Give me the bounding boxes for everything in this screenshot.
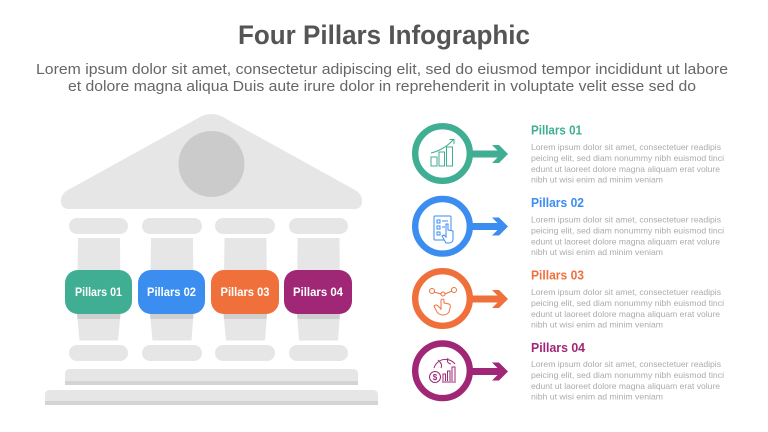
item 1: circle and arrow — [415, 126, 508, 181]
label: pillars 01 — [65, 270, 132, 314]
upper step — [65, 369, 358, 385]
label: pillars 04: Pillars 04 — [293, 287, 344, 299]
item 3: circle and arrow — [415, 271, 508, 326]
pediment — [61, 114, 362, 209]
item 1: body: Lorem ipsum dolor sit amet, consectetuer readipis — [531, 142, 721, 152]
item 2: circle and arrow — [415, 199, 508, 254]
subtitle: Lorem ipsum dolor sit amet, consectetur adipiscing elit, sed do eiusmod tempor incididunt ut labore — [36, 61, 728, 78]
item 3: body: edunt ut laoreet dolore magna aliquam erat volure — [531, 309, 720, 319]
label: pillars 03 — [211, 270, 279, 314]
subtitle: et dolore magna aliqua Duis aute irure dolor in reprehenderit in voluptate velit esse sed do — [68, 78, 696, 95]
column 3 — [215, 218, 275, 361]
item 3: body — [531, 287, 724, 330]
icon: dollar sign: $ — [433, 373, 438, 382]
item 4: body: Lorem ipsum dolor sit amet, consectetuer readipis — [531, 359, 721, 369]
label: pillars 04 — [284, 270, 352, 314]
item 1: body: peicing elit, sed diam nonummy nibh euismod tinci — [531, 153, 724, 163]
label: pillars 01: Pillars 01 — [75, 287, 123, 299]
icon: hand touching nodes — [430, 288, 456, 315]
column 4 — [289, 218, 348, 361]
item 4: body: nibh ut wisi enim ad minim veniam — [531, 392, 663, 402]
icon: checklist with hand — [434, 216, 453, 243]
item 4: circle and arrow — [415, 344, 508, 398]
column 1 — [69, 218, 128, 361]
lower step — [45, 390, 378, 405]
item 2: heading: Pillars 02 — [531, 195, 584, 210]
item 3: body: Lorem ipsum dolor sit amet, consectetuer readipis — [531, 287, 721, 297]
item 2: body: edunt ut laoreet dolore magna aliquam erat volure — [531, 236, 720, 246]
item 1: body: nibh ut wisi enim ad minim veniam — [531, 174, 663, 184]
icon: globe, coin and bars — [430, 358, 456, 382]
title: Four Pillars Infographic — [238, 20, 530, 50]
column 2 — [142, 218, 202, 361]
item 2: body: Lorem ipsum dolor sit amet, consectetuer readipis — [531, 214, 721, 224]
label: pillars 03: Pillars 03 — [220, 287, 270, 299]
label: pillars 02: Pillars 02 — [147, 287, 196, 299]
temple illustration — [45, 114, 378, 405]
item 4: body: peicing elit, sed diam nonummy nibh euismod tinci — [531, 370, 724, 380]
item 3: heading: Pillars 03 — [531, 268, 584, 282]
item 4: body: edunt ut laoreet dolore magna aliquam erat volure — [531, 381, 720, 391]
icon: growth chart — [431, 140, 454, 166]
label: pillars 02 — [138, 270, 205, 314]
item 2: body: peicing elit, sed diam nonummy nibh euismod tinci — [531, 226, 724, 236]
item 2: body: nibh ut wisi enim ad minim veniam — [531, 247, 663, 257]
item 1: body: edunt ut laoreet dolore magna aliquam erat volure — [531, 164, 720, 174]
item 2: body — [531, 214, 724, 257]
column shadows — [77, 314, 340, 319]
item 3: body: peicing elit, sed diam nonummy nibh euismod tinci — [531, 298, 724, 308]
item 1: heading: Pillars 01 — [531, 122, 582, 138]
pediment circle — [178, 131, 244, 197]
item 3: body: nibh ut wisi enim ad minim veniam — [531, 320, 663, 330]
item 4: body — [531, 359, 724, 402]
subtitle — [36, 61, 728, 95]
item 4: heading: Pillars 04 — [531, 340, 586, 355]
item 1: body — [531, 142, 724, 184]
